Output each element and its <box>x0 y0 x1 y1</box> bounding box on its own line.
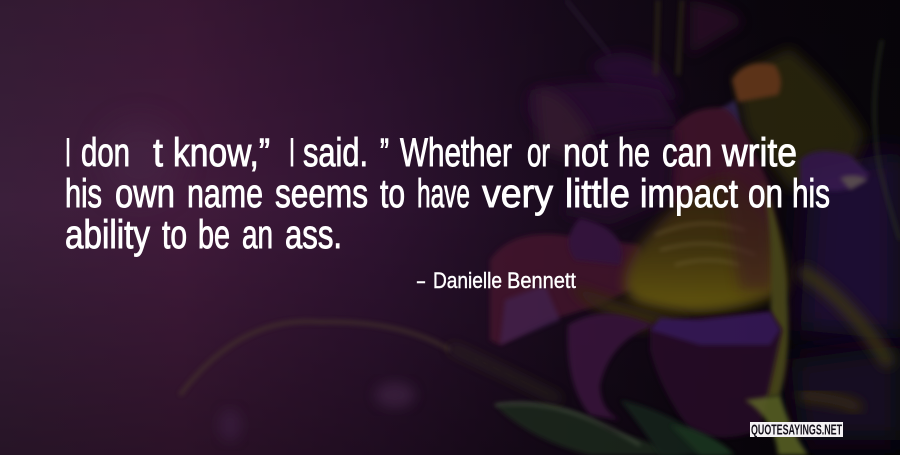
line 2: his <box>65 172 102 216</box>
line 2: on <box>748 172 783 216</box>
line 1: or <box>527 131 550 175</box>
line 3: to <box>162 213 187 257</box>
line 1: said. <box>303 131 368 175</box>
author attribution <box>417 268 576 293</box>
line 2: his <box>792 172 830 216</box>
line 3: ability <box>65 213 150 257</box>
line 1: can <box>662 131 712 175</box>
line 2: name <box>187 172 263 216</box>
author attribution: Bennett <box>507 268 576 293</box>
line 2 <box>65 172 830 216</box>
line 2: very <box>482 172 553 216</box>
line 2: to <box>380 172 405 216</box>
line 3 <box>65 213 342 257</box>
quote text <box>65 131 830 257</box>
line 1: he <box>618 131 650 175</box>
line 2: little <box>565 172 630 216</box>
line 3: an <box>242 213 273 257</box>
line 1: know,” <box>173 131 270 175</box>
stem and leaves <box>450 347 808 455</box>
line 2: seems <box>275 172 368 216</box>
line 1 <box>65 131 797 175</box>
line 2: impact <box>640 172 738 216</box>
line 1: not <box>563 131 608 175</box>
author attribution: – <box>417 268 425 293</box>
watermark <box>750 422 843 438</box>
line 1: write <box>721 131 797 175</box>
line 1: t <box>153 131 163 175</box>
flower petals <box>490 0 870 438</box>
line 1: I <box>289 131 295 175</box>
line 2: have <box>417 172 470 216</box>
line 1: ” <box>380 131 389 175</box>
line 1: I <box>65 131 71 175</box>
line 2: own <box>115 172 175 216</box>
line 1: don <box>81 131 130 175</box>
line 1: Whether <box>400 131 512 175</box>
line 3: ass. <box>285 213 342 257</box>
author attribution: Danielle <box>433 268 502 293</box>
line 3: be <box>198 213 230 257</box>
